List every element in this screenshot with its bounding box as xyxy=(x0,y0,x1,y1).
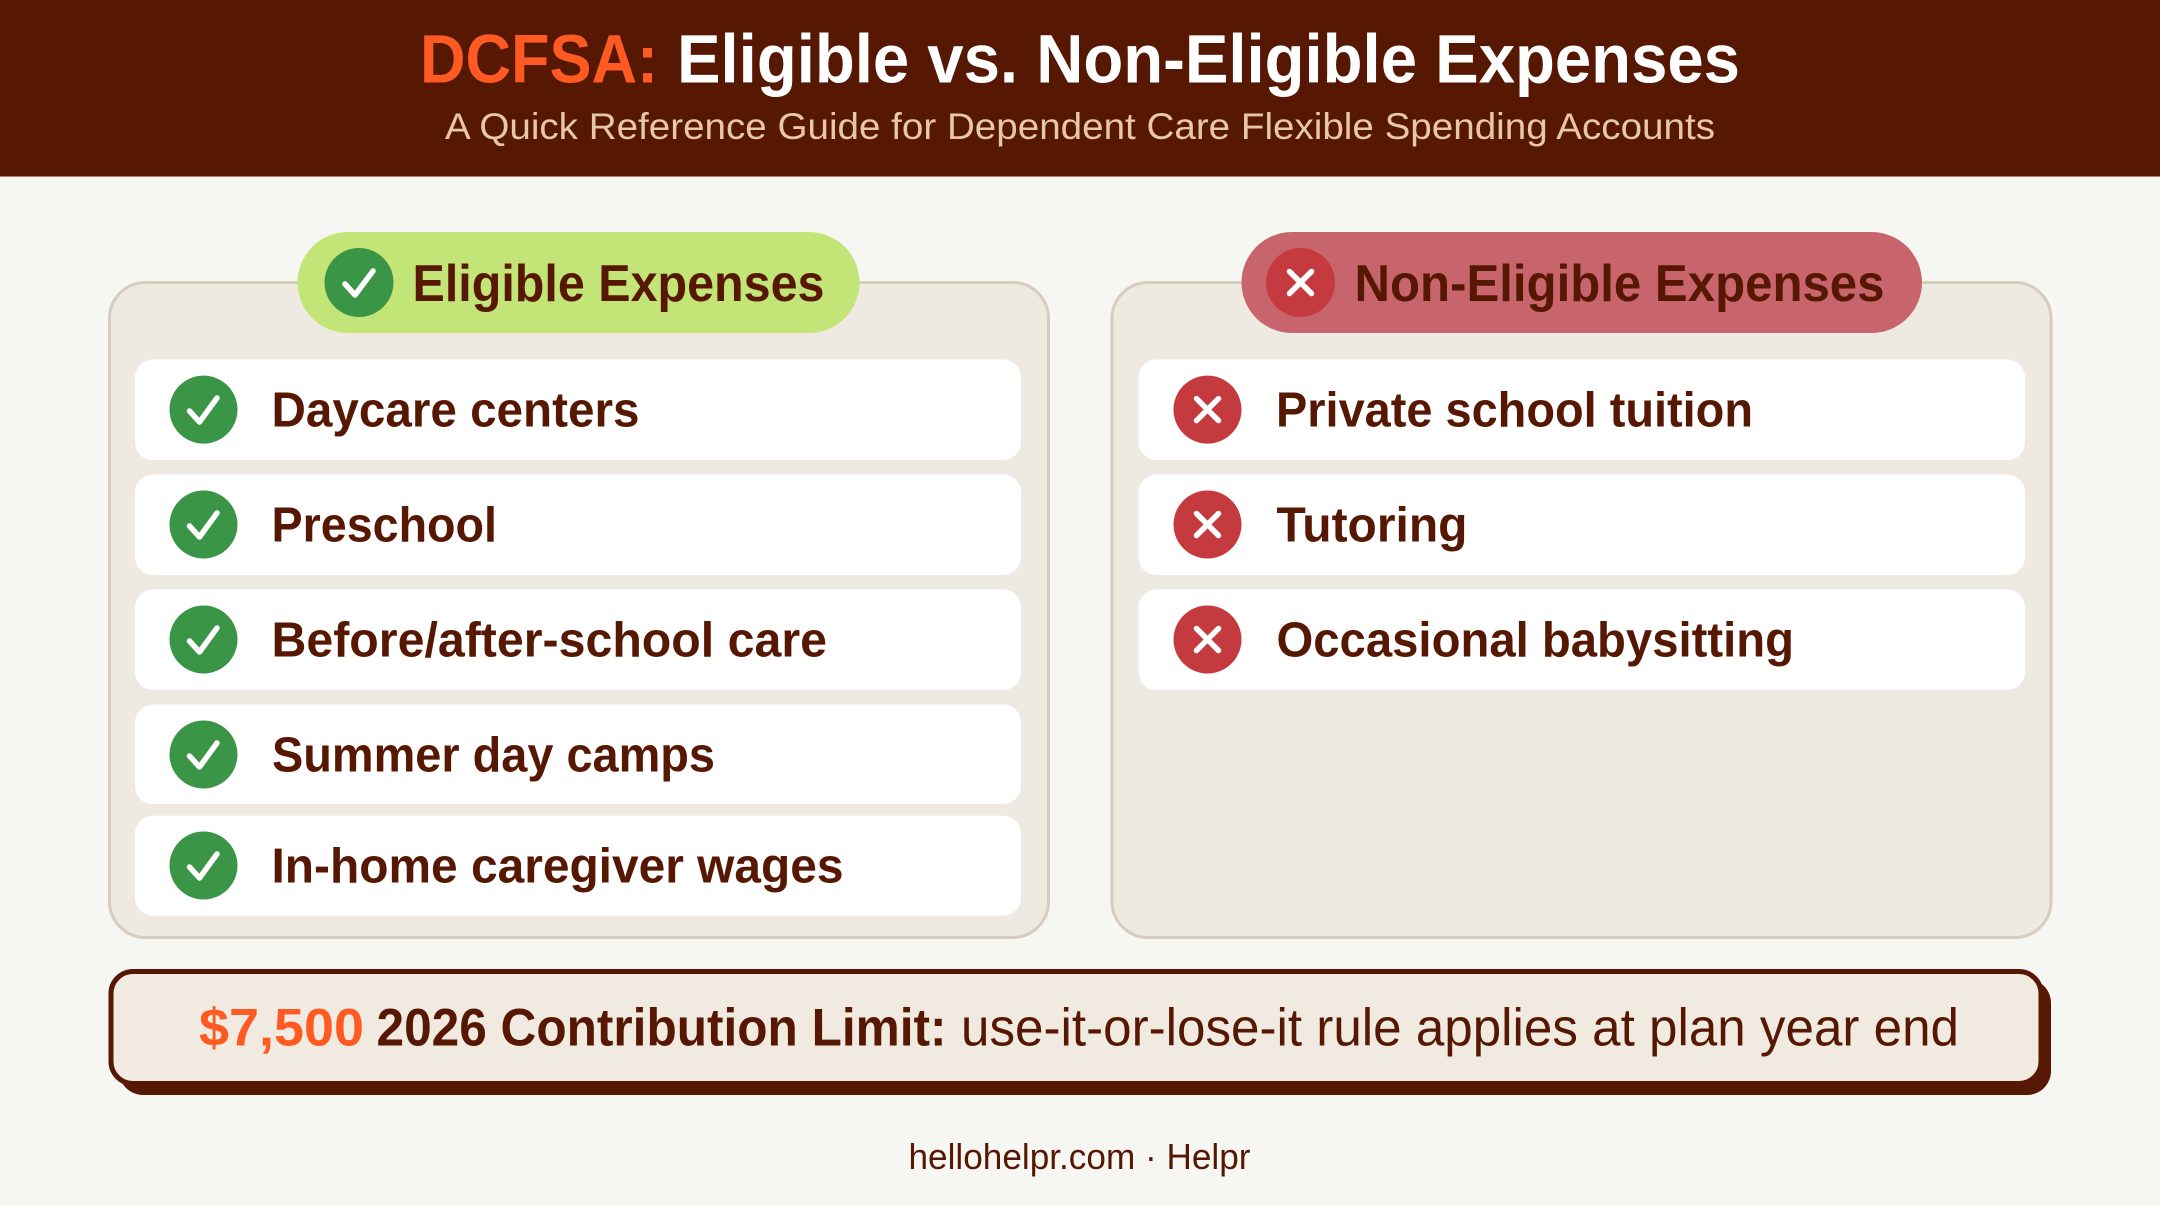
item: before/after-school care xyxy=(135,590,1021,690)
footer: hellohelpr.com · Helpr xyxy=(908,1136,1251,1177)
callout: contribution limit xyxy=(111,972,2051,1095)
item: preschool xyxy=(135,474,1021,575)
item: in-home caregiver wages xyxy=(135,816,1021,916)
item: private school tuition: Private school tuition xyxy=(1276,384,1753,438)
eligible heading text: Eligible Expenses xyxy=(412,254,824,312)
panel: eligible expenses xyxy=(110,232,1048,938)
item: summer day camps xyxy=(135,704,1021,804)
item: tutoring: Tutoring xyxy=(1276,499,1468,553)
item: preschool: Preschool xyxy=(272,499,497,553)
non-eligible heading pill xyxy=(1242,232,1922,333)
title: DCFSA: xyxy=(420,20,658,98)
icon: heading cross xyxy=(1266,248,1335,317)
eligible heading pill xyxy=(298,232,860,333)
title: Eligible vs. Non-Eligible Expenses xyxy=(677,20,1740,98)
item: before/after-school care: Before/after-school care xyxy=(272,614,827,668)
non-eligible heading text: Non-Eligible Expenses xyxy=(1354,254,1884,312)
callout: contribution limit: $7,500 xyxy=(199,999,364,1058)
header banner xyxy=(0,0,2160,176)
panel: non-eligible expenses xyxy=(1112,232,2051,938)
item: summer day camps: Summer day camps xyxy=(272,729,715,783)
item: private school tuition xyxy=(1138,360,2025,460)
item: occasional babysitting: Occasional babysitting xyxy=(1276,614,1794,668)
item: tutoring xyxy=(1138,474,2025,575)
icon: heading check xyxy=(324,248,394,317)
item: occasional babysitting xyxy=(1138,590,2025,690)
item: daycare centers: Daycare centers xyxy=(272,384,640,438)
item: in-home caregiver wages: In-home caregiver wages xyxy=(272,840,844,894)
subtitle: A Quick Reference Guide for Dependent Care Flexible Spending Accounts xyxy=(445,105,1715,147)
callout: contribution limit: use-it-or-lose-it rule applies at plan year end xyxy=(961,999,1959,1058)
callout: contribution limit: 2026 Contribution Limit: xyxy=(376,999,946,1058)
item: daycare centers xyxy=(135,360,1021,460)
